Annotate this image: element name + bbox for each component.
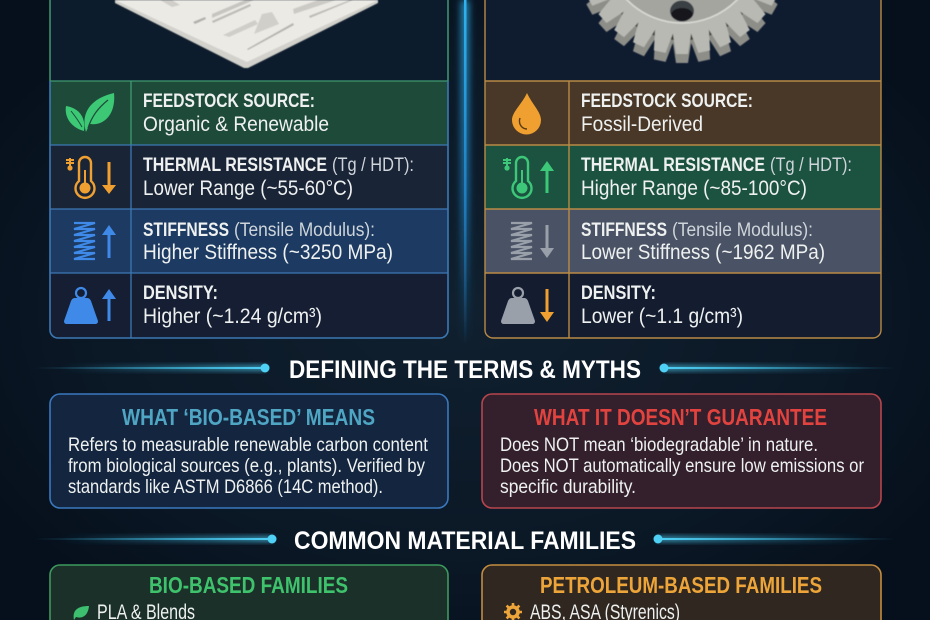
label: stiffness petroleum: STIFFNESS (581, 220, 667, 241)
heading: common material families: COMMON MATERIAL FAMILIES (294, 527, 636, 555)
row: density (485, 273, 881, 338)
central divider glow line (462, 0, 468, 345)
icon: weight and up arrow (64, 288, 116, 324)
label: density bio: DENSITY: (143, 283, 218, 304)
panel: bio-based families (50, 565, 448, 620)
heading: defining the terms and myths: DEFINING THE TERMS & MYTHS (289, 356, 641, 384)
panel: what it doesn't guarantee (482, 394, 881, 508)
panel: petroleum-based families (482, 565, 881, 620)
label: feedstock source petroleum: FEEDSTOCK SOURCE: (581, 91, 753, 112)
panel: petroleum-based material comparison (485, 0, 881, 338)
value: fossil derived: Fossil-Derived (581, 112, 703, 136)
row: feedstock source (485, 81, 881, 145)
value: organic and renewable: Organic & Renewable (143, 112, 329, 136)
panel: what bio-based means (50, 394, 448, 508)
row: feedstock source (50, 81, 448, 145)
image area: bio-based printed plate (50, 0, 448, 81)
value: lower range: Lower Range (~55-60°C) (143, 176, 353, 200)
label: stiffness bio: STIFFNESS (143, 220, 229, 241)
label: feedstock source bio: FEEDSTOCK SOURCE: (143, 91, 315, 112)
row: stiffness: (Tensile Modulus): (672, 220, 813, 241)
icon: thermometer and up arrow (503, 157, 554, 198)
row: density (50, 273, 448, 338)
row: stiffness: (Tensile Modulus): (234, 220, 375, 241)
heading: common material families (35, 527, 895, 555)
text block: bio-based definition: from biological sources (e.g., plants). Verified by (68, 455, 425, 477)
heading: defining the terms and myths (35, 356, 895, 384)
text block: guarantee caveats (500, 434, 864, 498)
label: thermal resistance petroleum: THERMAL RESISTANCE (581, 155, 765, 176)
icon: thermometer and down arrow (66, 157, 116, 198)
text block: bio-based definition: Refers to measurable renewable carbon content (68, 434, 428, 456)
icon: green leaves (66, 93, 114, 132)
row: thermal resistance: (Tg / HDT): (770, 155, 852, 176)
heading: bio-based families: BIO-BASED FAMILIES (149, 572, 348, 598)
row: thermal resistance: (Tg / HDT): (332, 155, 414, 176)
label: density petroleum: DENSITY: (581, 283, 656, 304)
value: lower density: Lower (~1.1 g/cm³) (581, 304, 743, 328)
label: thermal resistance bio: THERMAL RESISTANCE (143, 155, 327, 176)
value: higher density: Higher (~1.24 g/cm³) (143, 304, 322, 328)
row: thermal resistance (50, 145, 448, 209)
text block: bio-based definition (68, 434, 428, 498)
icon: spring and up arrow (74, 223, 116, 259)
list item: PLA and blends (74, 600, 195, 620)
text block: guarantee caveats: Does NOT automatically ensure low emissions or (500, 455, 864, 477)
icon: spring and down arrow (511, 223, 554, 259)
row: stiffness (485, 209, 881, 273)
panel: bio-based material comparison (50, 0, 448, 338)
row: thermal resistance (485, 145, 881, 209)
icon: weight and down arrow (501, 288, 554, 324)
value: higher stiffness: Higher Stiffness (~3250 MPa) (143, 240, 393, 264)
icon: oil drop (512, 93, 541, 134)
heading: petroleum-based families: PETROLEUM-BASED FAMILIES (540, 572, 822, 598)
text block: guarantee caveats: Does NOT mean ‘biodegradable’ in nature. (500, 434, 818, 456)
heading: what bio-based means: WHAT ‘BIO-BASED’ MEANS (122, 404, 375, 430)
value: lower stiffness: Lower Stiffness (~1962 MPa) (581, 240, 825, 264)
text block: guarantee caveats: specific durability. (500, 476, 636, 498)
value: higher range: Higher Range (~85-100°C) (581, 176, 807, 200)
list item: ABS and ASA (504, 600, 680, 620)
text block: bio-based definition: standards like ASTM D6866 (14C method). (68, 476, 383, 498)
image area: petroleum printed gear (485, 0, 881, 81)
heading: what it doesn't guarantee: WHAT IT DOESN’T GUARANTEE (534, 404, 827, 430)
row: stiffness (50, 209, 448, 273)
